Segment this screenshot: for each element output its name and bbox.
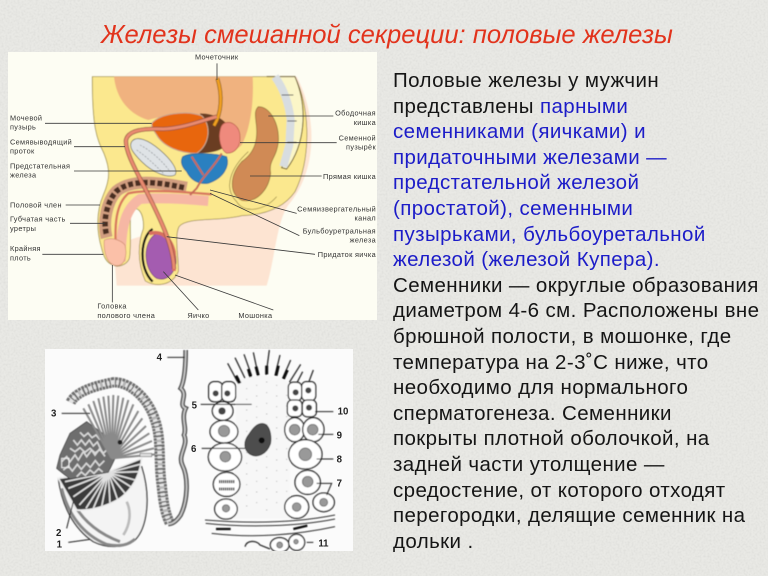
seminal vesicle [219, 122, 240, 153]
diagram labels: Придаток яичка [318, 250, 377, 259]
body text: Половые железы у мужчин [393, 69, 659, 92]
body silhouette [92, 77, 311, 286]
body text [393, 69, 759, 553]
epididymis [71, 382, 170, 523]
bladder back tissue [197, 113, 232, 153]
testis [143, 229, 176, 282]
panel: male reproductive anatomy diagram [8, 52, 377, 320]
body text: семенниками (яичками) и [393, 120, 646, 143]
colon [232, 107, 278, 201]
body text: покрыты плотной оболочкой, на [393, 427, 710, 450]
diagram labels: Семяизвергательный [297, 204, 376, 213]
figure numbers: 7 [337, 478, 342, 489]
panel: testis and seminiferous tubule diagram [45, 349, 353, 551]
sphincter band [230, 152, 277, 209]
body text: предстательной железой [393, 171, 639, 194]
intestine mass [114, 77, 253, 151]
figure numbers: 10 [338, 406, 348, 417]
diagram labels: Половой член [10, 200, 62, 209]
body text: задней части утолщение — [393, 453, 665, 476]
ejaculatory duct [190, 153, 222, 195]
prostate [181, 154, 228, 184]
diagram labels: проток [10, 147, 35, 156]
diagram labels: Предстательная [10, 161, 70, 170]
ureter [214, 78, 221, 126]
diagram labels: Бульбоуретральная [303, 226, 376, 235]
diagram labels: Яичко [187, 311, 210, 320]
figure numbers: 9 [337, 431, 343, 442]
diagram labels: Прямая кишка [323, 172, 377, 181]
figure numbers: 8 [337, 455, 343, 466]
body text: перегородки, делящие семенник на [393, 504, 745, 527]
diagram labels: кишка [354, 118, 377, 127]
title: Железы смешанной секреции: половые железы [101, 21, 673, 49]
body text: необходимо для нормального [393, 376, 688, 399]
body text: Семенники — округлые образования [393, 274, 759, 297]
diagram labels: плоть [10, 253, 31, 262]
body text: пузырьками, бульбоуретальной [393, 223, 706, 246]
leader lines [62, 357, 333, 542]
diagram labels: Семявыводящий [10, 137, 72, 146]
bladder [152, 113, 208, 153]
body text: температура на 2-3˚С ниже, что [393, 351, 709, 374]
figure numbers: 1 [57, 539, 63, 550]
corpus spongiosum [121, 198, 208, 262]
sertoli dots [247, 382, 287, 512]
body text: придаточными железами — [393, 146, 667, 169]
figure numbers [51, 352, 348, 550]
tubule cytoplasm [233, 376, 290, 518]
diagram labels: Крайняя [10, 244, 41, 253]
vas deferens [126, 117, 217, 269]
body text: сперматогенеза. Семенники [393, 402, 672, 425]
diagram labels: Мочевой [10, 113, 42, 122]
basement membrane [205, 515, 335, 549]
diagram labels: канал [354, 214, 376, 223]
figure numbers: 6 [191, 444, 197, 455]
germ cells [208, 382, 334, 552]
diagram labels: железа [350, 236, 377, 245]
diagram labels: Ободочная [335, 109, 376, 118]
testis lobule disc [58, 458, 142, 510]
diagram labels: пузырёк [346, 143, 376, 152]
diagram labels [10, 53, 377, 320]
figure numbers: 5 [192, 400, 198, 411]
body text: (простатой), семенными [393, 197, 633, 220]
diagram labels: Головка [97, 302, 127, 311]
vas deferens [168, 350, 187, 524]
body text: брюшной полости, в мошонке, где [393, 325, 732, 348]
figure numbers: 3 [51, 409, 57, 420]
sperm tails [228, 350, 313, 383]
diagram labels: железа [10, 171, 37, 180]
diagram labels: Семенной [339, 133, 376, 142]
diagram labels: полового члена [97, 311, 156, 320]
diagram labels: пузырь [10, 123, 36, 132]
body text: железой (железой Купера). [393, 248, 660, 271]
leader lines [42, 63, 337, 310]
figure numbers: 4 [157, 352, 163, 363]
diagram labels: уретры [10, 224, 36, 233]
figure numbers: 11 [318, 538, 329, 549]
body text: средостение, от которого отходят [393, 478, 726, 502]
glans and foreskin [104, 239, 126, 266]
urethra [115, 191, 212, 260]
pubic bone [131, 139, 176, 176]
body text: представлены парными [393, 95, 628, 118]
diagram labels: Мочеточник [195, 53, 239, 62]
efferent ducts [83, 395, 155, 458]
testis body [58, 467, 147, 546]
lobules [57, 422, 115, 479]
figure numbers: 2 [56, 528, 61, 539]
body text: диаметром 4-6 см. Расположены вне [393, 299, 759, 322]
diagram labels: Губчатая часть [10, 215, 66, 224]
corpus cavernosum [105, 183, 187, 238]
spine [267, 77, 303, 169]
diagram labels: Мошонка [238, 311, 273, 320]
body text: дольки . [393, 530, 474, 553]
sertoli cell nucleus [245, 423, 271, 456]
